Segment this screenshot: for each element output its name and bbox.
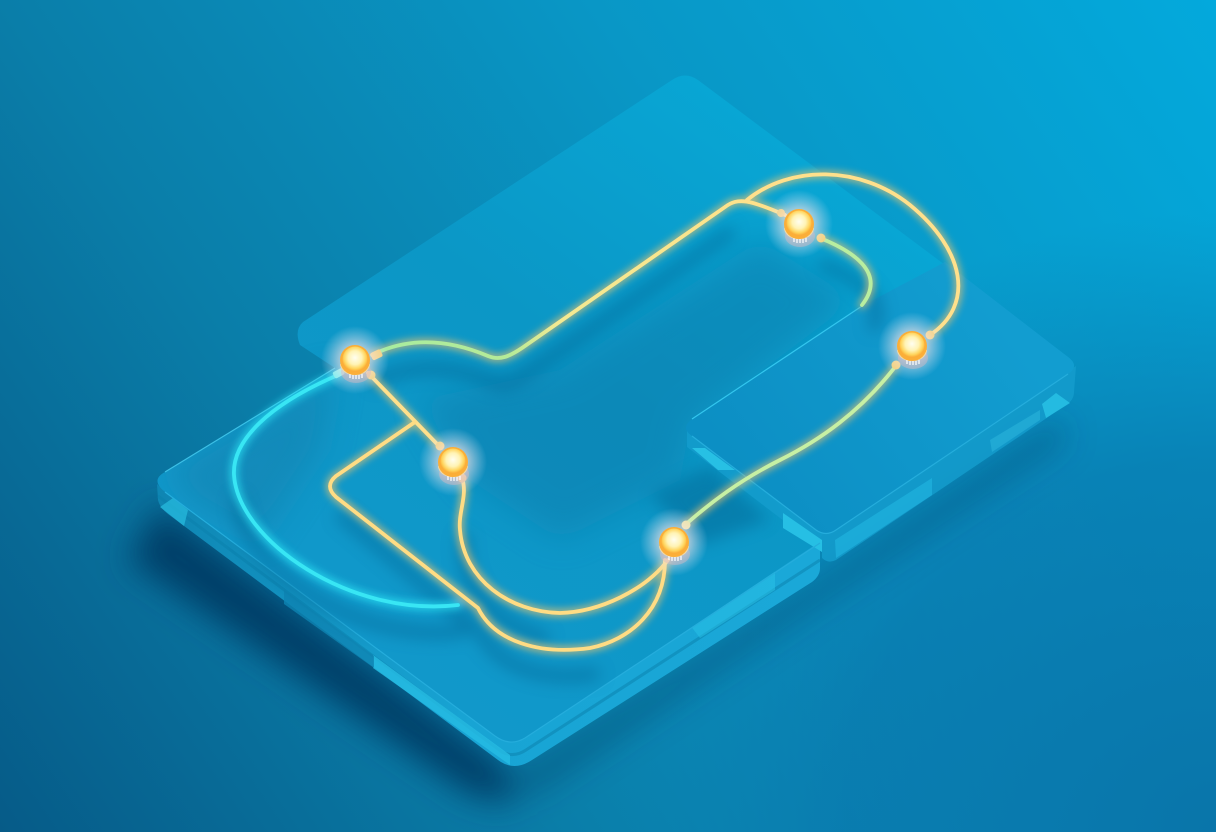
wire glow [234, 174, 958, 650]
wire: cyan arc [234, 375, 458, 606]
panel: soft shading on glass [165, 240, 855, 545]
wire: green s-curve [685, 367, 895, 525]
wire shadows [238, 233, 877, 676]
node: left [321, 326, 389, 394]
node: top [765, 190, 833, 258]
wire: green hook [820, 238, 871, 305]
wire: top-left node to top node [372, 201, 785, 358]
plate edge highlights [165, 306, 1068, 742]
panel: lower glass slab edge [157, 484, 820, 766]
panel: right glass slab edge [687, 366, 1076, 562]
connector stubs [332, 209, 934, 530]
wire: inner loop [460, 478, 668, 613]
panel: glass plate top [158, 76, 1074, 742]
node: right [878, 312, 946, 380]
cast shadows [128, 420, 1065, 805]
wire: diagonal link [368, 373, 440, 447]
node: centre [419, 428, 487, 496]
panel: right glass plate top [686, 262, 1074, 534]
node: bottom [640, 508, 708, 576]
wire: outer loop [330, 422, 665, 650]
wire: outer top arc [747, 174, 958, 335]
